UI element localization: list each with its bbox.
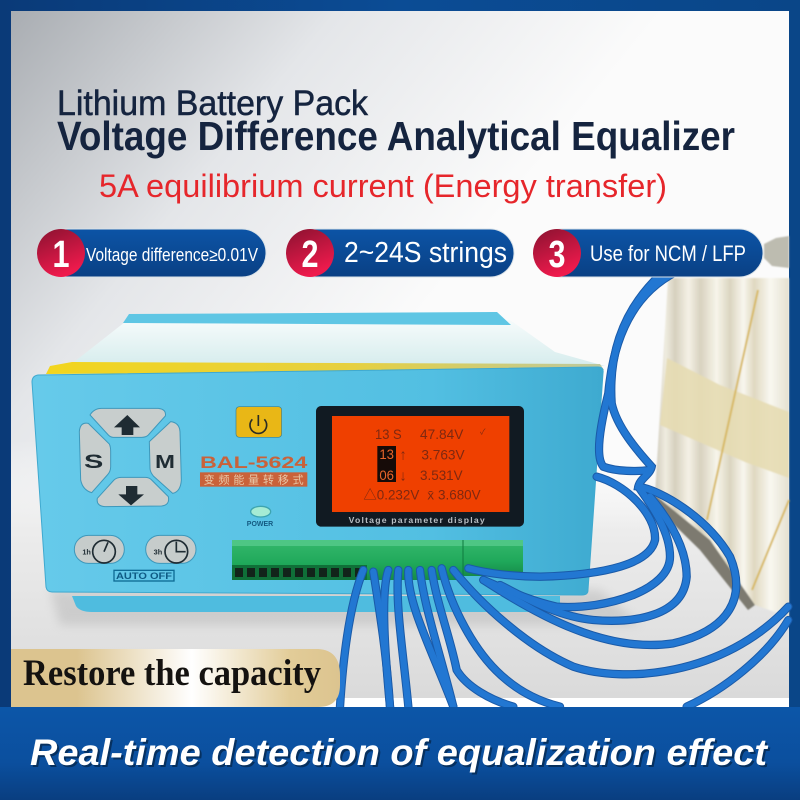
left S key xyxy=(79,423,111,493)
direction keypad xyxy=(74,407,308,581)
power LED xyxy=(251,506,271,517)
title line 1: Lithium Battery Pack xyxy=(57,84,368,123)
readout text: ✓ xyxy=(480,428,486,437)
right M key xyxy=(149,422,181,493)
equalizer device xyxy=(32,312,605,612)
auto off label: AUTO OFF xyxy=(116,571,172,581)
display caption: Voltage parameter display xyxy=(349,515,485,525)
voltage display xyxy=(316,406,524,527)
orange screen xyxy=(332,416,509,512)
feature 2: 2~24S strings xyxy=(344,237,507,269)
right M key: M xyxy=(155,451,175,472)
yellow strip xyxy=(46,362,604,374)
wire highlight layer xyxy=(340,272,788,707)
battery base shadow xyxy=(654,495,755,610)
title block xyxy=(57,84,735,204)
green terminal block xyxy=(232,540,523,580)
readout text: 3.763V xyxy=(421,446,465,462)
readout text: x̄ xyxy=(427,488,434,503)
readout text: 06 xyxy=(379,467,394,483)
feature 3: Use for NCM / LFP xyxy=(590,241,746,266)
feature 2 xyxy=(286,229,514,277)
blue sense wires xyxy=(340,272,788,707)
down key xyxy=(97,477,169,507)
power label: POWER xyxy=(247,521,273,528)
battery cells xyxy=(655,278,789,617)
feature 1: 1 xyxy=(52,234,70,276)
top surface xyxy=(46,320,605,376)
1h timer button: 1h xyxy=(82,547,91,556)
feature 2: 2 xyxy=(302,234,318,276)
foot xyxy=(72,596,560,612)
banner text: Real-time detection of equalization effect xyxy=(30,732,769,773)
display bezel xyxy=(316,406,524,527)
power button xyxy=(236,407,282,437)
brand label: BAL-5624 xyxy=(200,453,308,472)
3h timer button xyxy=(146,535,196,563)
readout text: 13 S xyxy=(375,426,402,442)
readout text: 47.84V xyxy=(420,426,464,442)
readout text: 3.680V xyxy=(438,487,481,503)
feature 1: Voltage difference≥0.01V xyxy=(86,245,258,265)
readout text: 13 xyxy=(379,446,394,462)
up key xyxy=(90,408,166,437)
left S key: S xyxy=(84,452,103,473)
title line 2: Voltage Difference Analytical Equalizer xyxy=(57,113,735,159)
restore capacity badge xyxy=(11,649,340,707)
front face xyxy=(32,367,603,595)
selected cell box xyxy=(377,446,396,482)
battery pack xyxy=(654,236,789,617)
restore capacity badge: Restore the capacity xyxy=(23,653,321,694)
3h timer button: 3h xyxy=(154,547,163,556)
feature pills xyxy=(37,229,763,277)
top lip xyxy=(123,312,511,325)
bottom banner xyxy=(0,707,800,800)
feature 3 xyxy=(533,229,763,277)
device shadow xyxy=(50,590,640,625)
feature 1 xyxy=(37,229,266,277)
readout text: 3.531V xyxy=(420,467,463,483)
tape band xyxy=(660,358,789,478)
1h timer button xyxy=(74,535,124,563)
readout text xyxy=(363,426,486,503)
brand subtitle: 变频能量转移式 xyxy=(204,473,304,487)
terminal slots xyxy=(235,568,363,577)
gold cell edges xyxy=(707,290,789,590)
feature 3: 3 xyxy=(548,234,566,276)
readout text: ↑ xyxy=(399,447,407,463)
wire shadow layer xyxy=(340,272,788,707)
banner text shadow: Real-time detection of equalization effect xyxy=(32,734,771,775)
subtitle: 5A equilibrium current (Energy transfer) xyxy=(99,168,667,204)
readout text: △0.232V xyxy=(363,488,420,503)
connector hardware xyxy=(764,236,789,268)
readout text: ↓ xyxy=(399,468,407,484)
